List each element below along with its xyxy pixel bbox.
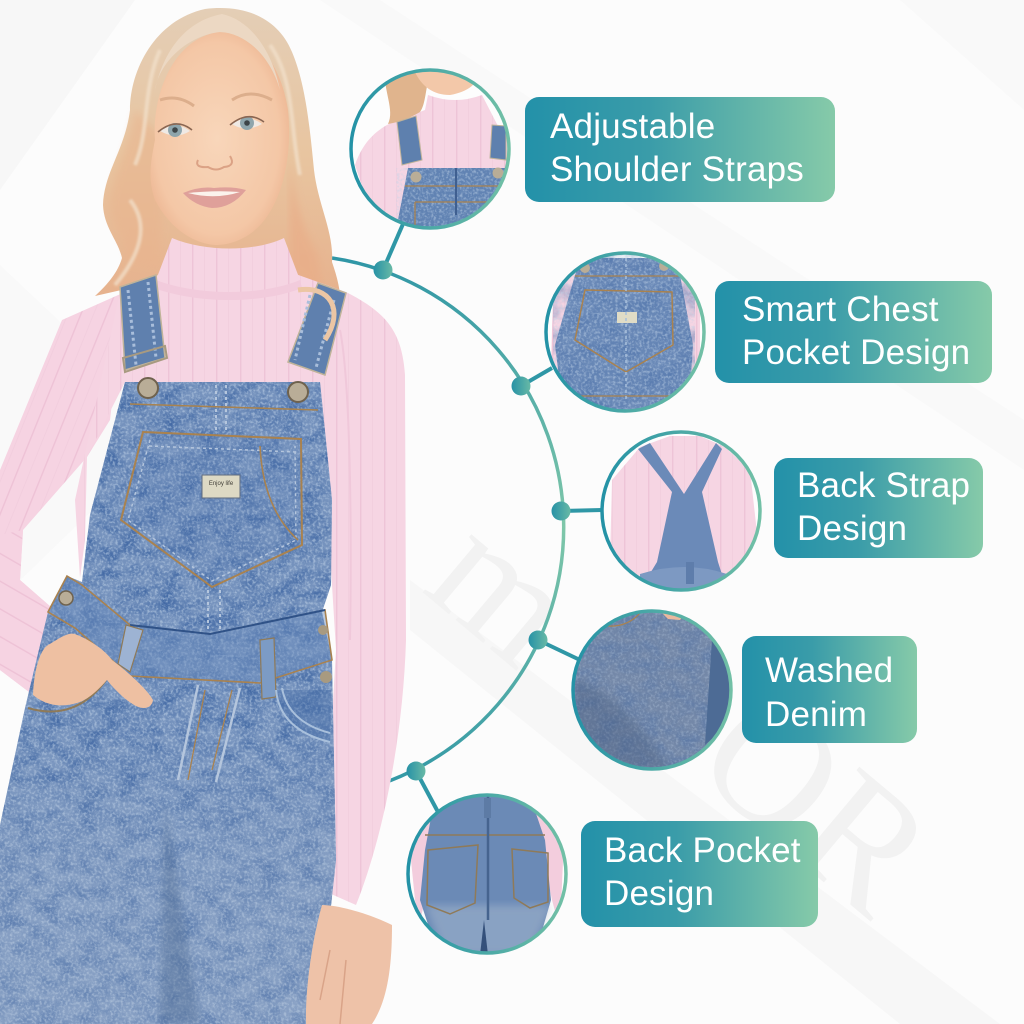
pocket label: [202, 475, 240, 498]
detail circle: back pocket: [408, 795, 568, 955]
sweater body and right sleeve: [75, 272, 406, 905]
label: smart chest pocket design: Smart Chest: [742, 290, 939, 329]
connector arc: [332, 258, 564, 796]
detail circle: back strap design: [602, 432, 762, 592]
bib seams: [130, 404, 318, 410]
label: adjustable shoulder straps: [525, 97, 835, 202]
label: washed denim: Washed: [765, 651, 893, 690]
label: smart chest pocket design: Pocket Design: [742, 333, 970, 372]
detail circle: smart chest pocket: [545, 252, 705, 413]
label: back strap design: [774, 458, 983, 558]
denim overalls: [0, 382, 336, 1024]
connector: back pocket: [406, 762, 438, 812]
waistband: [48, 576, 332, 683]
eyes: [160, 126, 190, 136]
label: smart chest pocket design: [715, 281, 992, 383]
hair: [95, 8, 341, 335]
buttons: [138, 378, 158, 398]
chest pocket: [121, 432, 302, 587]
label: adjustable shoulder straps: Shoulder Straps: [550, 150, 804, 189]
right strap: [288, 283, 346, 375]
detail circle: adjustable shoulder straps: [350, 70, 510, 230]
nose and mouth: [197, 156, 232, 170]
watermark: OR: [666, 654, 968, 951]
hair parting: [155, 14, 280, 90]
girl photo: [0, 0, 420, 1024]
label: washed denim: [742, 636, 917, 743]
detail circle: washed denim: [573, 611, 733, 771]
left strap: [120, 275, 167, 372]
front seam and pockets: [178, 685, 240, 782]
watermark: m: [397, 477, 613, 700]
label: back strap design: Design: [797, 509, 907, 548]
face: [150, 32, 289, 245]
connector: washed denim: [528, 630, 580, 660]
label: back pocket design: Back Pocket: [604, 831, 801, 870]
label: adjustable shoulder straps: Adjustable: [550, 107, 715, 146]
label: back pocket design: Design: [604, 874, 714, 913]
label: back pocket design: [581, 821, 818, 927]
connector: straps: [374, 224, 403, 280]
watermark: [397, 477, 968, 951]
sweater left arm: [0, 292, 125, 695]
pocket label: Enjoy life: [209, 481, 234, 487]
label: washed denim: Denim: [765, 695, 867, 734]
connector: chest pocket: [512, 368, 552, 396]
turtleneck: [156, 238, 300, 292]
belt loops: [118, 625, 143, 672]
right hand: [306, 905, 392, 1024]
hand in pocket: [33, 634, 153, 708]
label: back strap design: Back Strap: [797, 466, 970, 505]
hair curl over strap: [298, 289, 334, 340]
connector: back strap: [552, 502, 602, 520]
